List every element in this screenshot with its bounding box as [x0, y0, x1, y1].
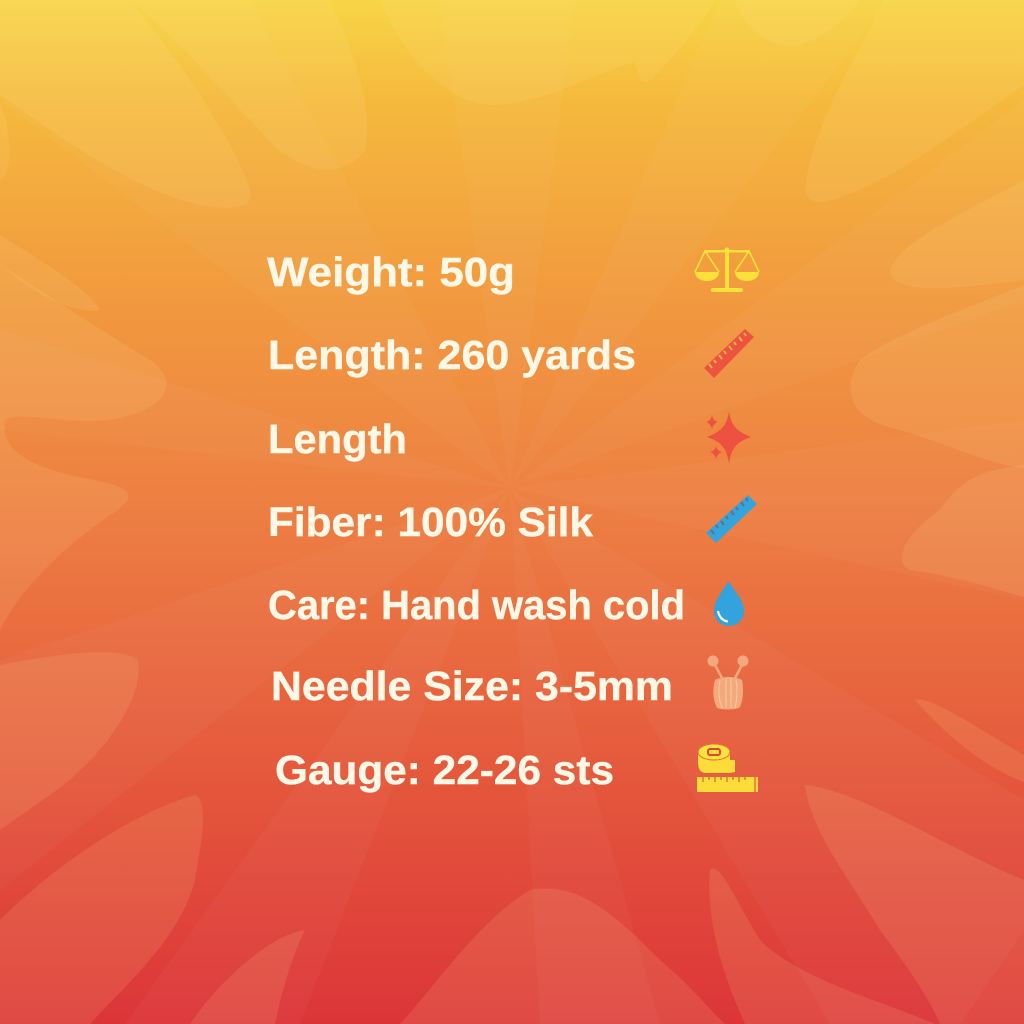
- text: fiber: Fiber: 100% Silk: [268, 499, 593, 545]
- icon: measuring tape: [697, 744, 758, 792]
- icon: balance scale: [695, 248, 759, 292]
- text: length: Length: [268, 416, 407, 462]
- icon: sparkles: [706, 411, 751, 464]
- text: care: Care: Hand wash cold: [268, 582, 685, 628]
- text: needle size: Needle Size: 3-5mm: [271, 663, 673, 709]
- icon: red ruler: [704, 329, 754, 378]
- icon: knitting needles and yarn: [708, 656, 748, 710]
- text: gauge: Gauge: 22-26 sts: [275, 747, 614, 793]
- text: length in yards: Length: 260 yards: [268, 332, 636, 378]
- text: weight: Weight: 50g: [267, 249, 515, 295]
- icon: water drop: [714, 581, 744, 626]
- icon: blue ruler: [706, 495, 757, 543]
